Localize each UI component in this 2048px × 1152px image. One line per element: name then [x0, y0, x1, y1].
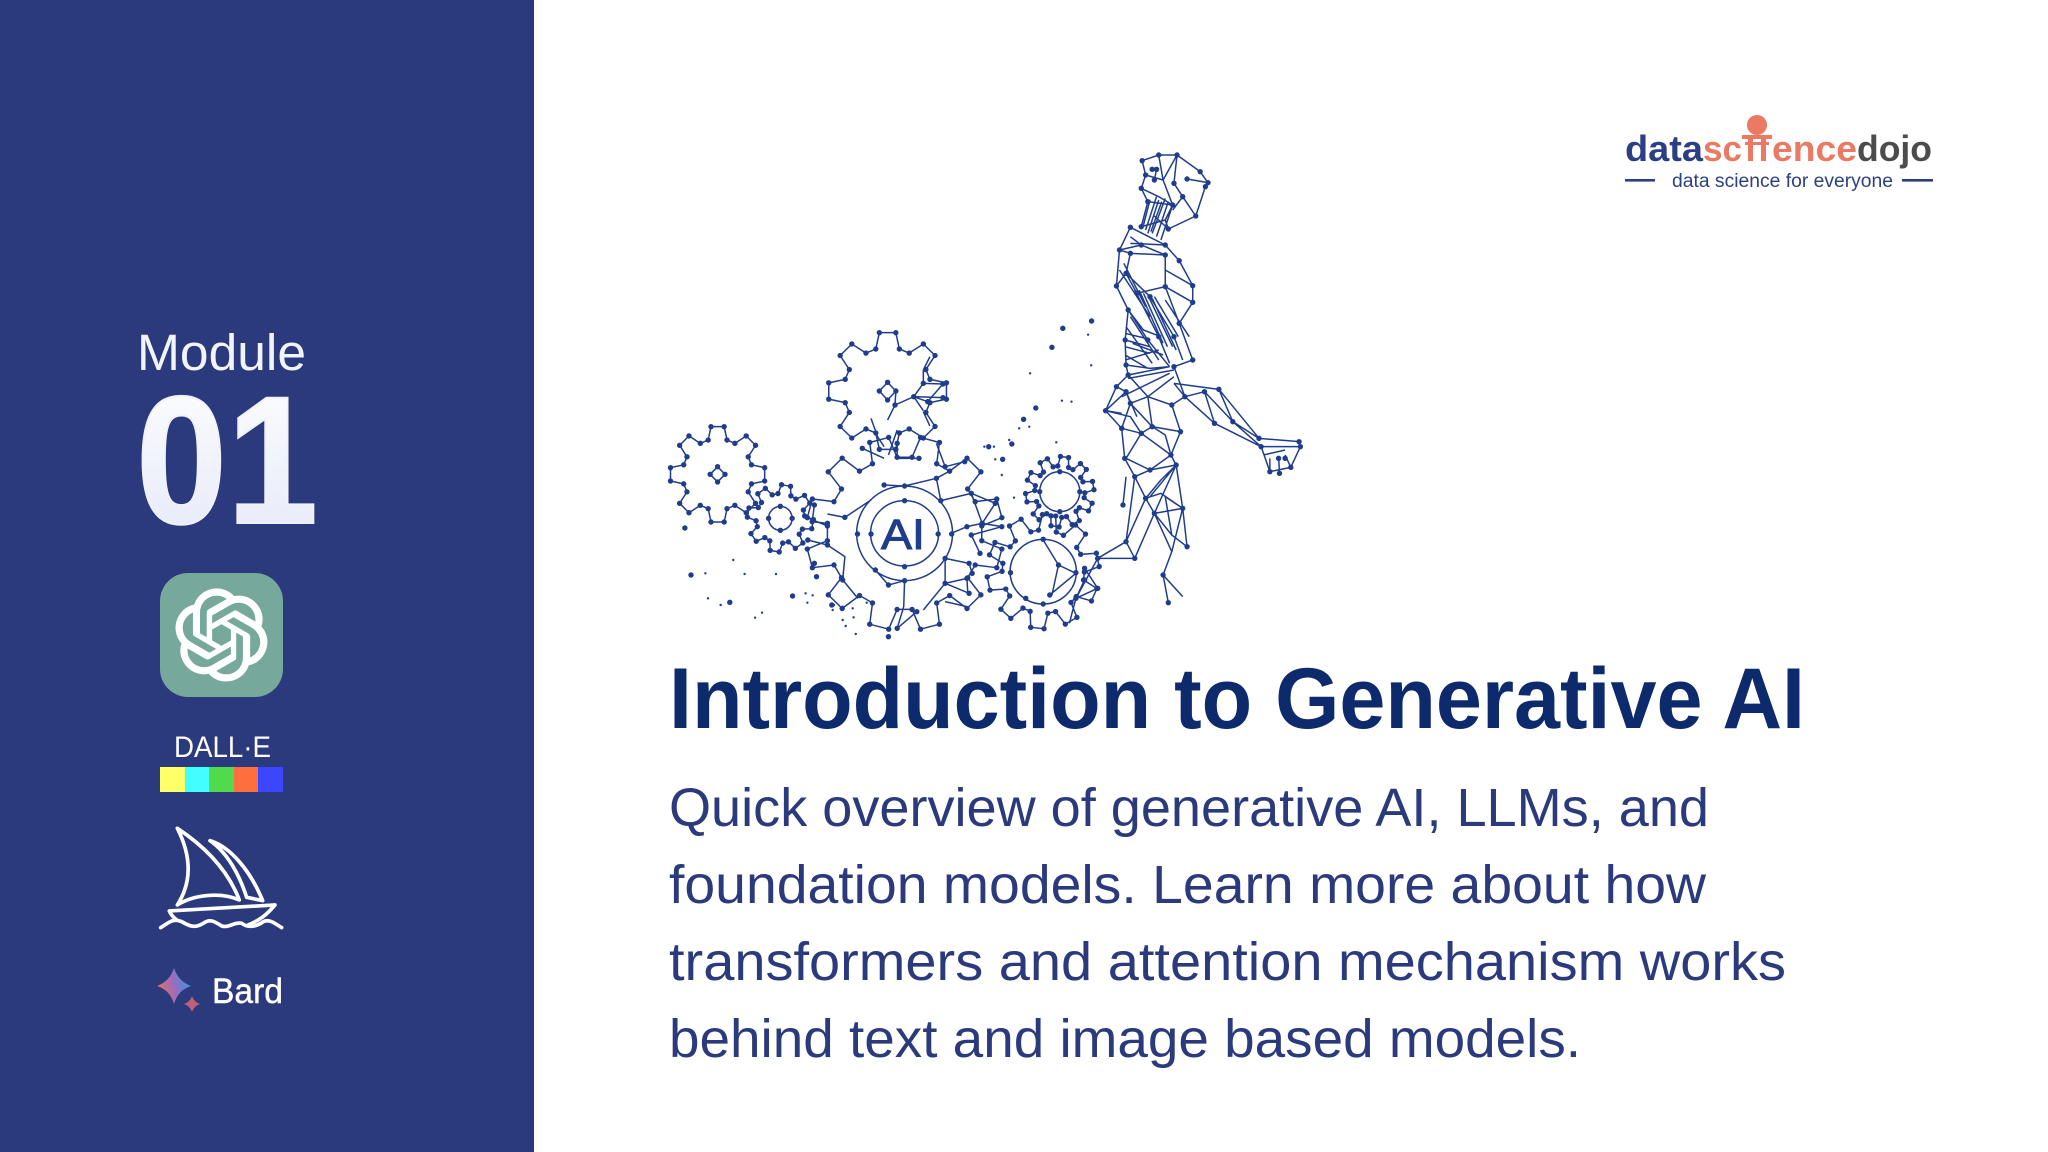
- icon: Bard: Bard: [212, 972, 283, 1011]
- logo: data science dojo: dojo: [1857, 128, 1932, 169]
- gear: lower right: [980, 509, 1107, 634]
- description text: Quick overview of generative AI, LLMs, and: [669, 778, 1709, 838]
- description text: behind text and image based models.: [669, 1009, 1581, 1069]
- title: Introduction to Generative AI: [669, 651, 1805, 747]
- logo: data science dojo: sc: [1703, 128, 1742, 169]
- label: Module: Module: [137, 324, 306, 381]
- gear: small right: [1020, 452, 1100, 531]
- description text: transformers and attention mechanism works: [669, 932, 1786, 992]
- logo: data science dojo: data: [1625, 128, 1704, 169]
- module number: 01: [136, 358, 318, 562]
- illustration: gears and wireframe figure: [671, 155, 1300, 652]
- logo: data science dojo: [1625, 115, 1933, 192]
- description text: foundation models. Learn more about how: [669, 855, 1707, 915]
- icon: Midjourney boat: [161, 828, 282, 928]
- description text: [669, 778, 1786, 1069]
- icon: Bard: [157, 968, 283, 1012]
- panel: module sidebar: [0, 0, 534, 1152]
- gear: small left: [742, 480, 818, 557]
- icon: DALL-E: [160, 731, 283, 792]
- wireframe human figure: [1076, 155, 1300, 603]
- AI label in gear: AI: [881, 511, 925, 559]
- icon: DALL-E: DALL·E: [174, 731, 271, 764]
- logo: data science dojo: ence: [1772, 128, 1857, 169]
- logo: data science dojo: data science for everyone: [1672, 171, 1893, 192]
- icon: ChatGPT: [160, 573, 283, 697]
- gear: top: [829, 333, 946, 455]
- scattered particles: [685, 321, 1092, 637]
- gear: far left: [671, 427, 765, 522]
- gear: central AI gear: [784, 414, 1025, 652]
